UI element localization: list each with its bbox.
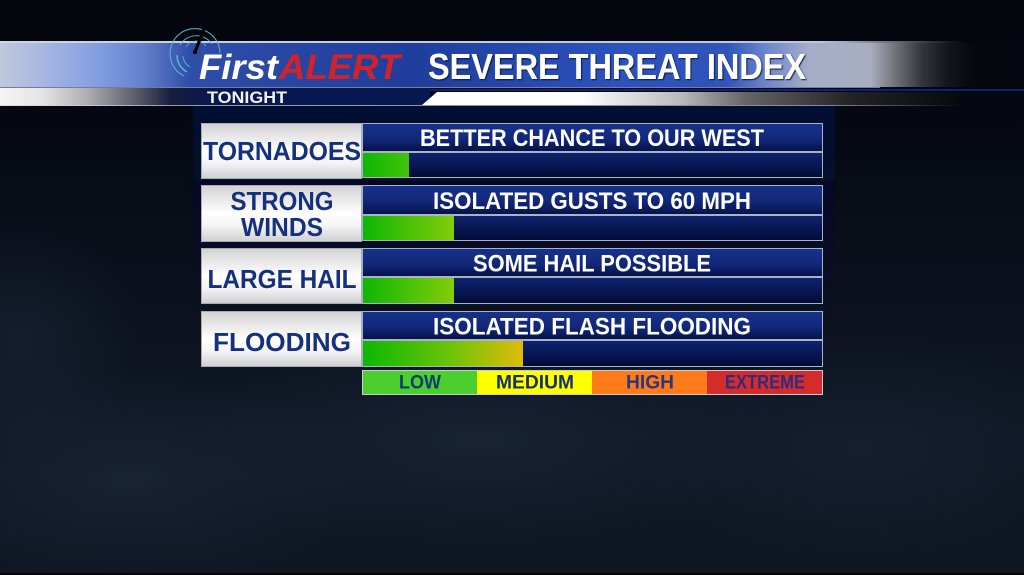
label: flooding: FLOODING — [213, 327, 351, 357]
threat bar: low to medium — [362, 278, 822, 304]
logo: First Alert: First — [199, 48, 279, 87]
header banner — [0, 24, 1024, 107]
label: flooding — [202, 312, 362, 366]
lower strip — [0, 88, 430, 106]
description: isolated gusts — [362, 186, 822, 215]
panel: flooding — [202, 312, 822, 366]
label: strong winds — [202, 186, 362, 242]
description: isolated gusts: ISOLATED GUSTS TO 60 MPH — [433, 188, 751, 215]
description: some hail: SOME HAIL POSSIBLE — [473, 250, 711, 278]
legend — [362, 370, 823, 395]
description: isolated flash flooding: ISOLATED FLASH FLOODING — [433, 314, 751, 340]
white swoosh strip — [422, 92, 960, 105]
legend: medium: MEDIUM — [496, 372, 574, 394]
icon: radar tower — [170, 24, 220, 76]
legend: extreme — [707, 370, 823, 395]
legend: high: HIGH — [626, 372, 674, 394]
label: large hail — [202, 248, 362, 304]
label: strong winds: WINDS — [241, 212, 323, 242]
legend: low: LOW — [399, 372, 441, 394]
label: tornadoes — [202, 124, 362, 178]
label: tornadoes: TORNADOES — [203, 136, 361, 166]
legend: high — [592, 370, 707, 395]
panel: large hail — [202, 248, 822, 304]
description: better chance: BETTER CHANCE TO OUR WEST — [420, 125, 764, 152]
title: SEVERE THREAT INDEX — [428, 46, 806, 87]
header blue bar — [0, 41, 1024, 87]
legend: extreme: EXTREME — [725, 372, 805, 394]
panel: tornadoes — [202, 124, 822, 178]
legend: low — [362, 370, 477, 395]
description: some hail — [362, 248, 822, 278]
panel: strong winds — [202, 186, 822, 242]
description: isolated flash flooding — [362, 312, 822, 340]
label: strong winds: STRONG — [230, 186, 334, 216]
logo: First Alert — [199, 48, 403, 87]
threat bar: medium — [362, 340, 822, 366]
label: large hail: LARGE HAIL — [208, 264, 357, 294]
threat bar: low — [362, 152, 822, 178]
logo: First Alert: ALERT — [278, 48, 403, 87]
subtitle: tonight: TONIGHT — [207, 88, 288, 107]
legend: medium — [477, 370, 592, 395]
threat bar: low to medium — [362, 216, 822, 240]
